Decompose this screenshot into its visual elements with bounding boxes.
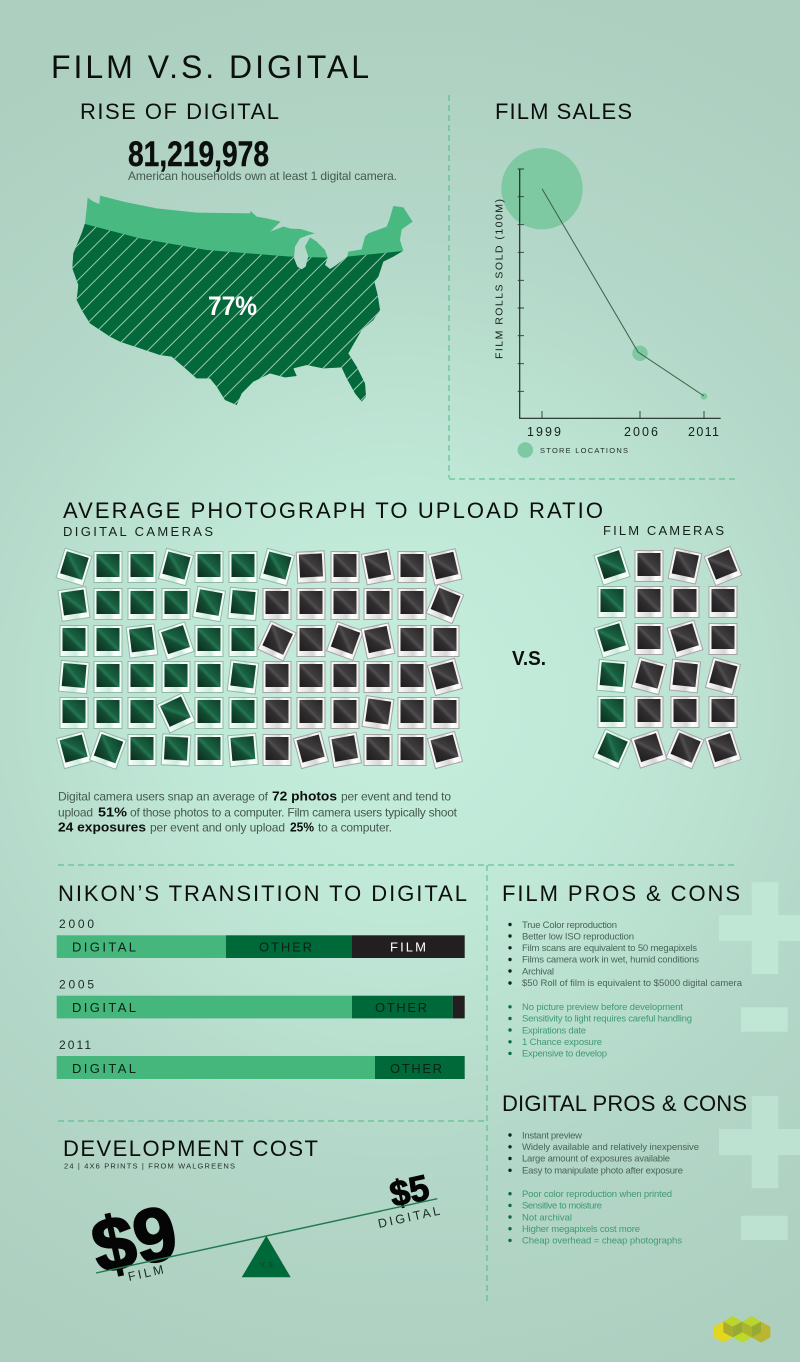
paragraph: upload statistics: 24 exposures — [58, 820, 146, 834]
list: film cons: Sensitivity to light requires careful handling — [522, 1014, 692, 1025]
title: FILM V.S. DIGITAL — [51, 49, 369, 85]
bar: 2005: 2005 — [59, 978, 94, 992]
list: film pros: $50 Roll of film is equivalent to $5000 digital camera — [522, 978, 743, 989]
panel: digital pros and cons — [502, 1091, 800, 1247]
icon: logo cubes — [714, 1316, 770, 1343]
legend: store locations: STORE LOCATIONS — [540, 446, 628, 455]
map: USA 77 percent — [72, 196, 412, 405]
panel: nikon transition — [57, 881, 467, 1079]
paragraph: upload statistics: 25% — [290, 820, 314, 834]
pivot label: V.S. — [260, 1262, 276, 1269]
list: digital cons: Higher megapixels cost more — [522, 1224, 640, 1235]
bar: 2005 — [57, 978, 465, 1018]
list: digital cons: Not archival — [522, 1212, 572, 1223]
heading: film sales: FILM SALES — [495, 99, 632, 124]
map percentage: 77% — [208, 291, 257, 321]
list: film cons: Expensive to develop — [522, 1049, 607, 1060]
list: digital cons — [510, 1189, 682, 1247]
bar: 2011 — [57, 1038, 465, 1079]
stat caption: American households own at least 1 digital camera. — [128, 169, 397, 183]
panel: rise of digital — [72, 104, 412, 405]
list: film pros: Film scans are equivalent to 50 megapixels — [522, 943, 697, 954]
list: digital pros: Instant preview — [522, 1130, 582, 1141]
stat: households: 81,219,978 — [128, 135, 269, 174]
icon: plus — [719, 882, 800, 974]
heading: upload ratio: AVERAGE PHOTOGRAPH TO UPLOAD RATIO — [63, 498, 603, 523]
panel: film sales — [494, 99, 721, 458]
price: film: $9 — [85, 1190, 185, 1291]
paragraph: upload statistics: per event and only upload — [150, 820, 285, 834]
bar: 2005: OTHER — [375, 1000, 427, 1015]
list: digital cons: Sensitive to moisture — [522, 1201, 602, 1212]
bar: 2000: 2000 — [59, 917, 94, 931]
chart: film rolls sold: FILM ROLLS SOLD (100M) — [494, 199, 506, 359]
list: digital pros: Large amount of exposures available — [522, 1154, 670, 1165]
list: film pros — [510, 920, 743, 989]
bar: 2011: 2011 — [59, 1038, 91, 1052]
price: digital: $5 — [386, 1166, 433, 1215]
label: film: FILM — [127, 1263, 165, 1284]
photo grid: film cameras — [593, 546, 742, 769]
photo grid: digital cameras — [56, 548, 464, 769]
list: film pros: True Color reproduction — [522, 920, 617, 931]
bar: 2000: OTHER — [259, 940, 312, 955]
bar: 2000: FILM — [390, 940, 426, 955]
subheading: prints: 24 | 4X6 PRINTS | FROM WALGREENS — [64, 1162, 235, 1171]
list: film pros: Better low ISO reproduction — [522, 932, 634, 942]
list: film cons: No picture preview before development — [522, 1002, 683, 1013]
list: film pros: Archival — [522, 966, 554, 977]
list: digital pros — [510, 1130, 699, 1177]
panel: development cost — [63, 1136, 441, 1291]
list: film cons — [510, 1002, 692, 1060]
chart: film rolls sold: 2011 — [688, 425, 719, 439]
bar: 2011: OTHER — [390, 1061, 442, 1076]
list: film cons: Expirations date — [522, 1025, 586, 1036]
paragraph: upload statistics: 72 photos — [272, 790, 337, 804]
paragraph: upload statistics: Digital camera users snap an average of — [58, 790, 269, 804]
label: digital: DIGITAL — [377, 1204, 441, 1231]
chart: film rolls sold: 1999 — [527, 425, 561, 439]
chart: film rolls sold — [494, 148, 721, 439]
seesaw: pivot — [242, 1236, 291, 1277]
chart: film rolls sold: 2006 — [624, 425, 658, 439]
panel: upload ratio — [56, 498, 742, 834]
list: digital pros: Easy to manipulate photo after exposure — [522, 1166, 683, 1177]
icon: minus — [741, 1216, 788, 1240]
bar: 2000 — [57, 917, 465, 958]
list: digital cons: Cheap overhead = cheap photographs — [522, 1236, 682, 1247]
bar: 2011: DIGITAL — [72, 1061, 136, 1076]
heading: digital pros and cons: DIGITAL PROS & CONS — [502, 1091, 747, 1116]
paragraph: upload statistics: 51% — [98, 806, 127, 820]
v.s. label: V.S. — [512, 648, 546, 670]
seesaw: beam — [96, 1199, 437, 1273]
heading: development cost: DEVELOPMENT COST — [63, 1136, 318, 1161]
bar: 2000: DIGITAL — [72, 940, 136, 955]
icon: plus — [719, 1096, 800, 1188]
label: film cameras: FILM CAMERAS — [603, 523, 724, 538]
list: digital pros: Widely available and relatively inexpensive — [522, 1142, 699, 1153]
list: film cons: 1 Chance exposure — [522, 1037, 602, 1048]
list: film pros: Films camera work in wet, humid conditions — [522, 955, 699, 966]
heading: film pros and cons: FILM PROS & CONS — [502, 881, 740, 906]
icon: minus — [741, 1007, 788, 1032]
heading: rise of digital: RISE OF DIGITAL — [80, 99, 279, 124]
list: digital cons: Poor color reproduction when printed — [522, 1189, 672, 1200]
paragraph: upload statistics: to a computer. — [318, 820, 392, 834]
bar: 2005: DIGITAL — [72, 1000, 136, 1015]
label: digital cameras: DIGITAL CAMERAS — [63, 524, 213, 539]
panel: film pros and cons — [502, 881, 800, 1060]
paragraph: upload statistics: of those photos to a computer. Film camera users typically shoot — [130, 806, 458, 820]
paragraph: upload statistics: upload — [58, 806, 93, 820]
paragraph: upload statistics — [58, 790, 458, 834]
heading: nikon transition: NIKON’S TRANSITION TO DIGITAL — [58, 881, 467, 906]
paragraph: upload statistics: per event and tend to — [341, 790, 451, 804]
legend: store locations — [518, 442, 628, 458]
